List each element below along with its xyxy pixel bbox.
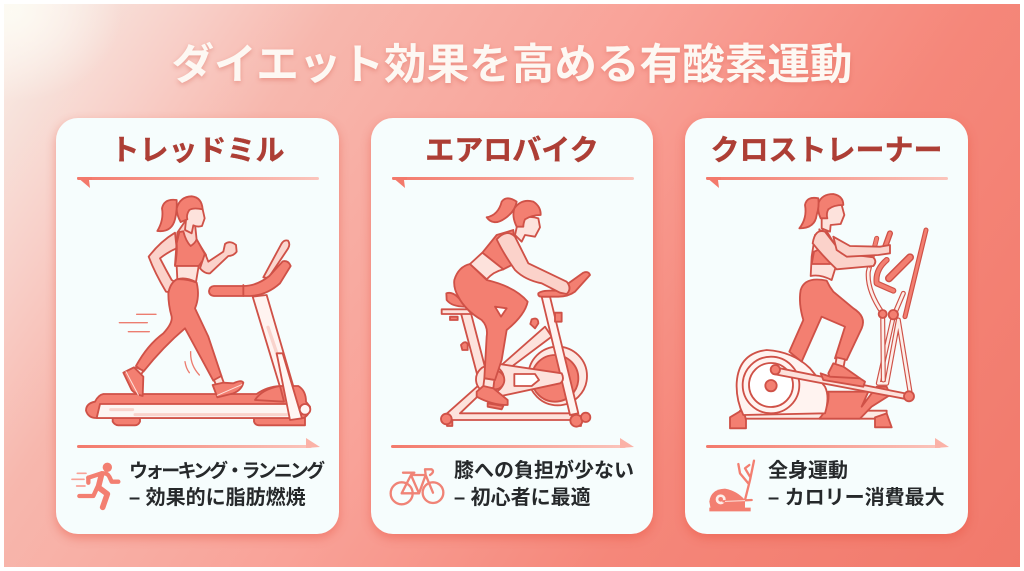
illustration: woman on cross trainer bbox=[730, 194, 926, 428]
title: ダイエット効果を高める有酸素運動 bbox=[171, 41, 853, 89]
description: exercise bike: 膝への負担が少ない bbox=[454, 460, 634, 482]
head bbox=[515, 217, 540, 242]
illustration: woman on treadmill bbox=[86, 196, 310, 425]
rear arms bbox=[905, 230, 926, 317]
illustration: woman on exercise bike bbox=[441, 198, 590, 427]
leg bbox=[454, 264, 528, 380]
frame bbox=[443, 327, 572, 420]
bottom rule arrow: cross trainer bbox=[706, 438, 949, 448]
heading: exercise bike: エアロバイク bbox=[425, 135, 599, 167]
head bbox=[822, 205, 844, 232]
flywheel bbox=[528, 347, 587, 405]
front arm bbox=[200, 242, 237, 273]
description: treadmill bbox=[129, 460, 325, 509]
arm bbox=[813, 231, 875, 269]
crank guard bbox=[492, 363, 563, 397]
console bbox=[263, 240, 289, 278]
bottom rule arrow: bike bbox=[391, 438, 634, 448]
deck bbox=[113, 417, 140, 425]
shoes bbox=[213, 381, 243, 397]
pedal arm bbox=[773, 367, 908, 399]
panel: exercise bike bbox=[371, 118, 653, 534]
upright bbox=[253, 295, 303, 420]
top rule arrow: bike bbox=[392, 177, 634, 188]
top rule arrow: cross trainer bbox=[706, 177, 948, 188]
icon: running person bbox=[72, 463, 118, 507]
description: exercise bike: – 初心者に最適 bbox=[454, 487, 591, 509]
top rule arrow: treadmill bbox=[77, 177, 319, 188]
description: treadmill: – 効果的に脂肪燃焼 bbox=[129, 487, 306, 509]
legs bbox=[136, 279, 222, 381]
bottom rule arrow: treadmill bbox=[77, 438, 320, 448]
icon: bicycle bbox=[391, 469, 443, 504]
heading: cross trainer: クロストレーナー bbox=[710, 135, 942, 167]
description: cross trainer: 全身運動 bbox=[768, 460, 848, 482]
description: exercise bike bbox=[454, 460, 634, 509]
flywheel housing bbox=[737, 350, 827, 415]
neck & torso bbox=[175, 220, 206, 266]
description: cross trainer: – カロリー消費最大 bbox=[768, 487, 945, 509]
back arm bbox=[149, 233, 177, 293]
arm bbox=[497, 233, 569, 294]
torso bbox=[482, 230, 515, 269]
motion lines bbox=[119, 314, 199, 375]
description: cross trainer bbox=[768, 460, 945, 509]
heading: treadmill: トレッドミル bbox=[110, 135, 284, 167]
description: treadmill: ウォーキング・ランニング bbox=[129, 461, 322, 482]
base bbox=[740, 411, 887, 419]
torso bbox=[811, 228, 840, 280]
panel: cross trainer bbox=[685, 118, 968, 534]
seat post bbox=[461, 313, 488, 382]
icon: elliptical bbox=[709, 461, 754, 511]
head bbox=[185, 206, 205, 233]
legs bbox=[789, 279, 863, 362]
panel: treadmill bbox=[56, 118, 339, 534]
